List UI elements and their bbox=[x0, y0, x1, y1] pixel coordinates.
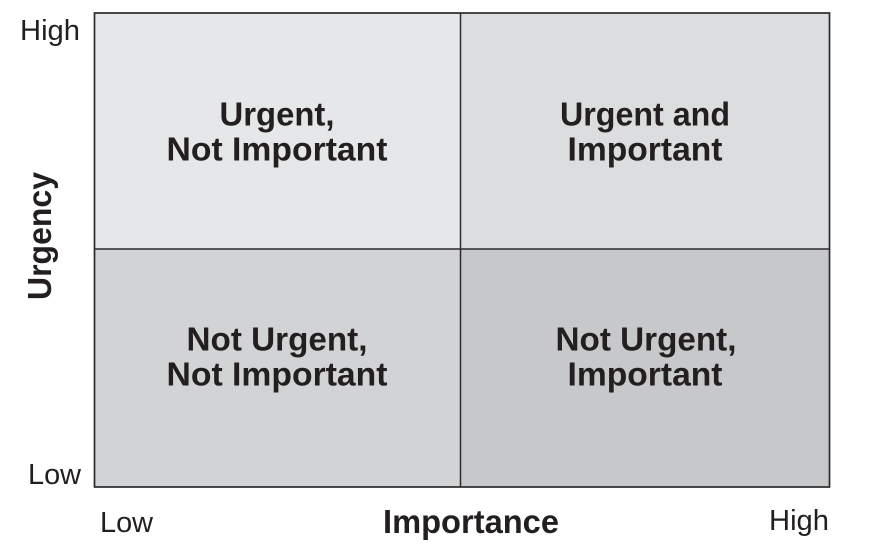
quadrant: not urgent, not important: Not Important bbox=[166, 356, 388, 392]
quadrant: urgent, not important: Not Important bbox=[166, 130, 388, 168]
y axis title: Urgency bbox=[21, 171, 58, 300]
quadrant: urgent, not important: Urgent, bbox=[220, 96, 334, 132]
x axis low label: Low bbox=[100, 507, 154, 539]
quadrant: urgent and important: Urgent and bbox=[560, 96, 730, 132]
quadrant: not urgent, important: Not Urgent, bbox=[556, 320, 736, 358]
quadrant: not urgent, important: Important bbox=[568, 356, 722, 392]
quadrant: urgent and important bbox=[461, 13, 830, 249]
matrix frame and dividers bbox=[94, 13, 830, 487]
quadrant: not urgent, important bbox=[461, 249, 830, 487]
quadrant: urgent, not important bbox=[95, 13, 461, 249]
x axis high label: High bbox=[769, 505, 829, 537]
y axis high label: High bbox=[20, 15, 80, 47]
quadrant: urgent and important: Important bbox=[568, 130, 722, 168]
quadrant: not urgent, not important: Not Urgent, bbox=[186, 320, 368, 358]
x axis title: Importance bbox=[383, 503, 559, 540]
y axis low label: Low bbox=[28, 459, 82, 491]
quadrant: not urgent, not important bbox=[95, 249, 461, 487]
